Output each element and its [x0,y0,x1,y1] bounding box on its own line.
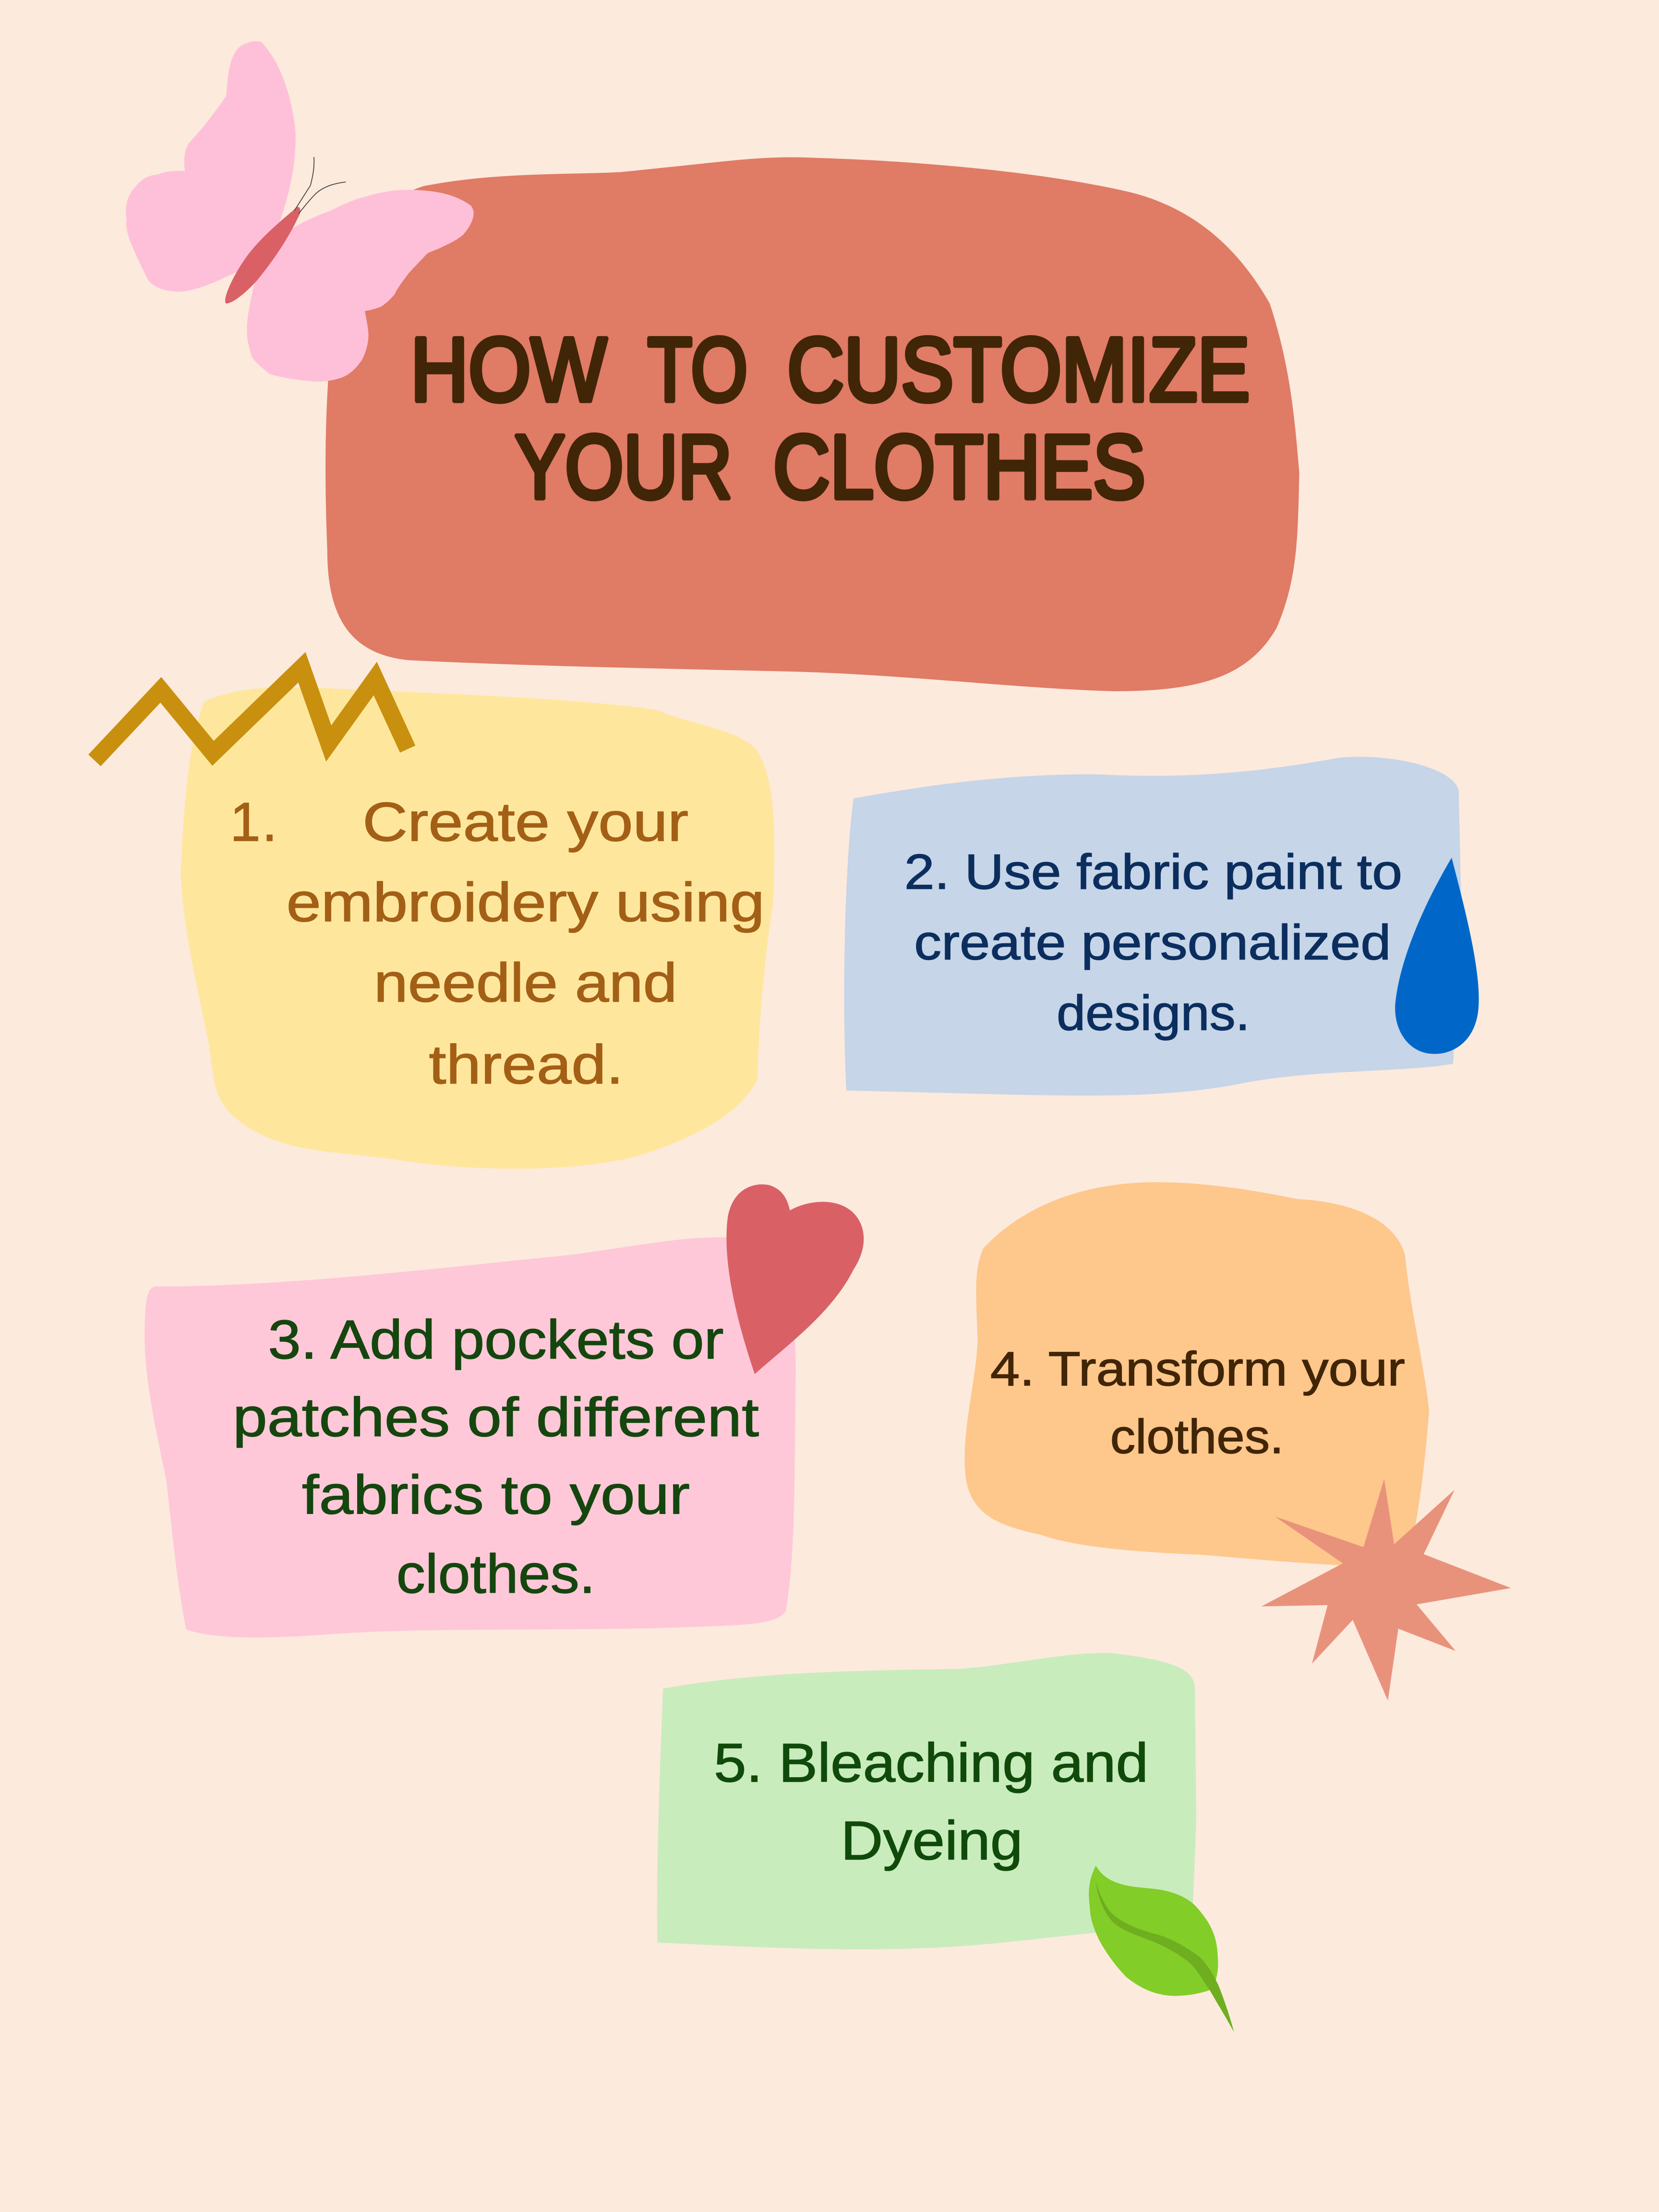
step 1 text: embroidery using [287,872,765,933]
step 4 text [990,1343,1405,1464]
step 1 text: Create your [362,792,688,853]
title text: YOUR [515,416,732,517]
icon: butterfly [126,41,474,382]
step 5 text: Dyeing [841,1810,1023,1871]
icon: zigzag [95,667,408,760]
step 2 text: designs. [1057,985,1250,1040]
step 2 text: 2. Use fabric paint to [904,844,1402,899]
title text [410,319,1250,517]
panel: step 2 [844,757,1462,1095]
icon: leaf [1089,1866,1234,2032]
panel: step 5 [657,1653,1196,1949]
icon: star [1262,1479,1511,1701]
step 3 text: patches of different [233,1387,759,1448]
step 3 text: 3. Add pockets or [268,1309,724,1370]
icon: heart [726,1184,864,1374]
step 3 text [233,1309,759,1605]
step 5 text: 5. Bleaching and [714,1732,1148,1794]
step 2 text [904,844,1402,1040]
panel: step 4 [964,1182,1429,1566]
step 1 text: 1. [230,792,278,853]
step 1 text: needle and [374,952,677,1014]
title panel [325,157,1299,691]
step 3 text: fabrics to your [302,1464,690,1526]
step 5 text [714,1732,1148,1871]
title text: CUSTOMIZE [787,319,1250,420]
step 4 text: clothes. [1110,1410,1284,1464]
step 4 text: 4. Transform your [990,1343,1405,1396]
panel: step 1 [180,687,774,1169]
step 1 text [230,792,765,1095]
title text: HOW [410,319,607,420]
step 3 text: clothes. [397,1543,595,1605]
step 2 text: create personalized [914,914,1391,970]
title text: TO [648,319,748,420]
step 1 text: thread. [429,1034,624,1095]
panel: step 3 [144,1238,796,1637]
title text: CLOTHES [773,416,1145,517]
icon: water drop [1395,858,1479,1054]
